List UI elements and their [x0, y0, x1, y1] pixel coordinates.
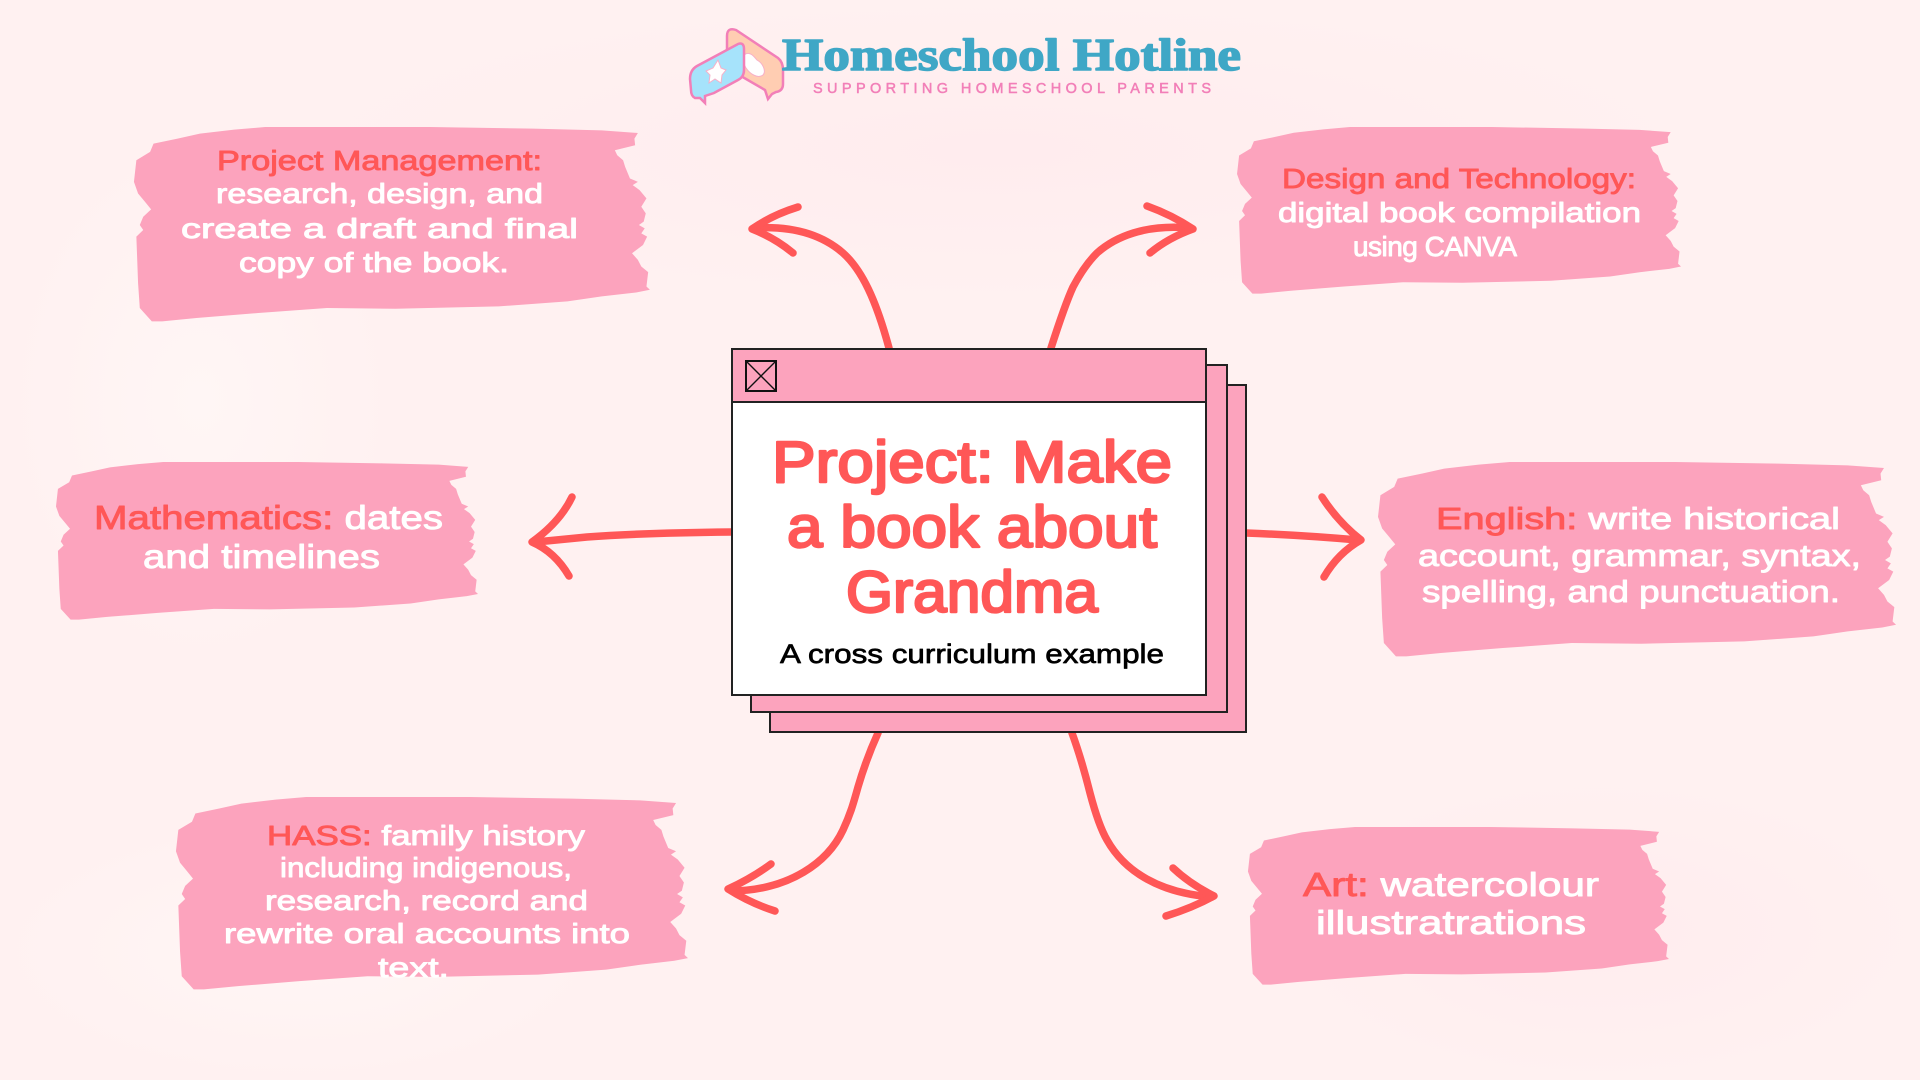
panel: Mathematics: and timelines — [143, 538, 380, 575]
arrow: to Mathematics — [532, 497, 731, 576]
panel: Design and Technology: Design and Technology: — [1282, 163, 1636, 194]
panel: Design and Technology — [1237, 127, 1681, 294]
panel: Project Management — [134, 127, 650, 321]
panel: Mathematics — [56, 462, 478, 620]
panel: Art: Art: watercolour — [1303, 866, 1599, 903]
logo tagline: SUPPORTING HOMESCHOOL PARENTS — [813, 81, 1211, 97]
arrow: to Design and Technology — [1051, 206, 1193, 348]
main title: a book about — [787, 495, 1157, 560]
panel: HASS: rewrite oral accounts into — [224, 918, 630, 949]
arrow: to English — [1246, 497, 1361, 577]
panel: English — [1378, 462, 1896, 656]
panel: Project Management: create a draft and final — [181, 213, 578, 244]
main title: Project: Make — [772, 430, 1172, 495]
panel: Art: illustratrations — [1316, 904, 1586, 941]
icon: speech bubbles with heart and star — [690, 29, 783, 103]
panel: Project Management: research, design, and — [216, 178, 543, 209]
panel: central window stack — [732, 349, 1246, 732]
panel: English: English: write historical — [1436, 501, 1840, 536]
panel: HASS: including indigenous, — [280, 852, 572, 883]
panel: English: spelling, and punctuation. — [1422, 574, 1840, 609]
panel: Art — [1248, 827, 1669, 985]
panel: Design and Technology: digital book compilation — [1278, 197, 1641, 228]
main title: Grandma — [846, 560, 1099, 625]
panel: HASS — [176, 797, 688, 989]
icon: window close box — [746, 361, 776, 391]
logo name: Homeschool Hotline — [782, 29, 1241, 80]
arrow: to HASS — [728, 733, 878, 911]
panel: Design and Technology: using CANVA — [1353, 231, 1517, 262]
logo: Homeschool Hotline — [690, 29, 1241, 103]
panel: Project Management: Project Management: — [217, 145, 542, 176]
main title — [772, 430, 1172, 625]
panel: Mathematics: Mathematics: dates — [94, 499, 443, 536]
arrow: to Art — [1072, 733, 1214, 916]
subtitle: A cross curriculum example — [780, 639, 1164, 669]
panel: HASS: HASS: family history — [267, 820, 585, 851]
panel: HASS: text. — [378, 952, 449, 983]
window title bar — [732, 349, 1206, 402]
arrow: to Project Management — [752, 207, 889, 348]
panel: HASS: research, record and — [265, 885, 588, 916]
panel: Project Management: copy of the book. — [239, 247, 509, 278]
panel: English: account, grammar, syntax, — [1418, 538, 1861, 573]
